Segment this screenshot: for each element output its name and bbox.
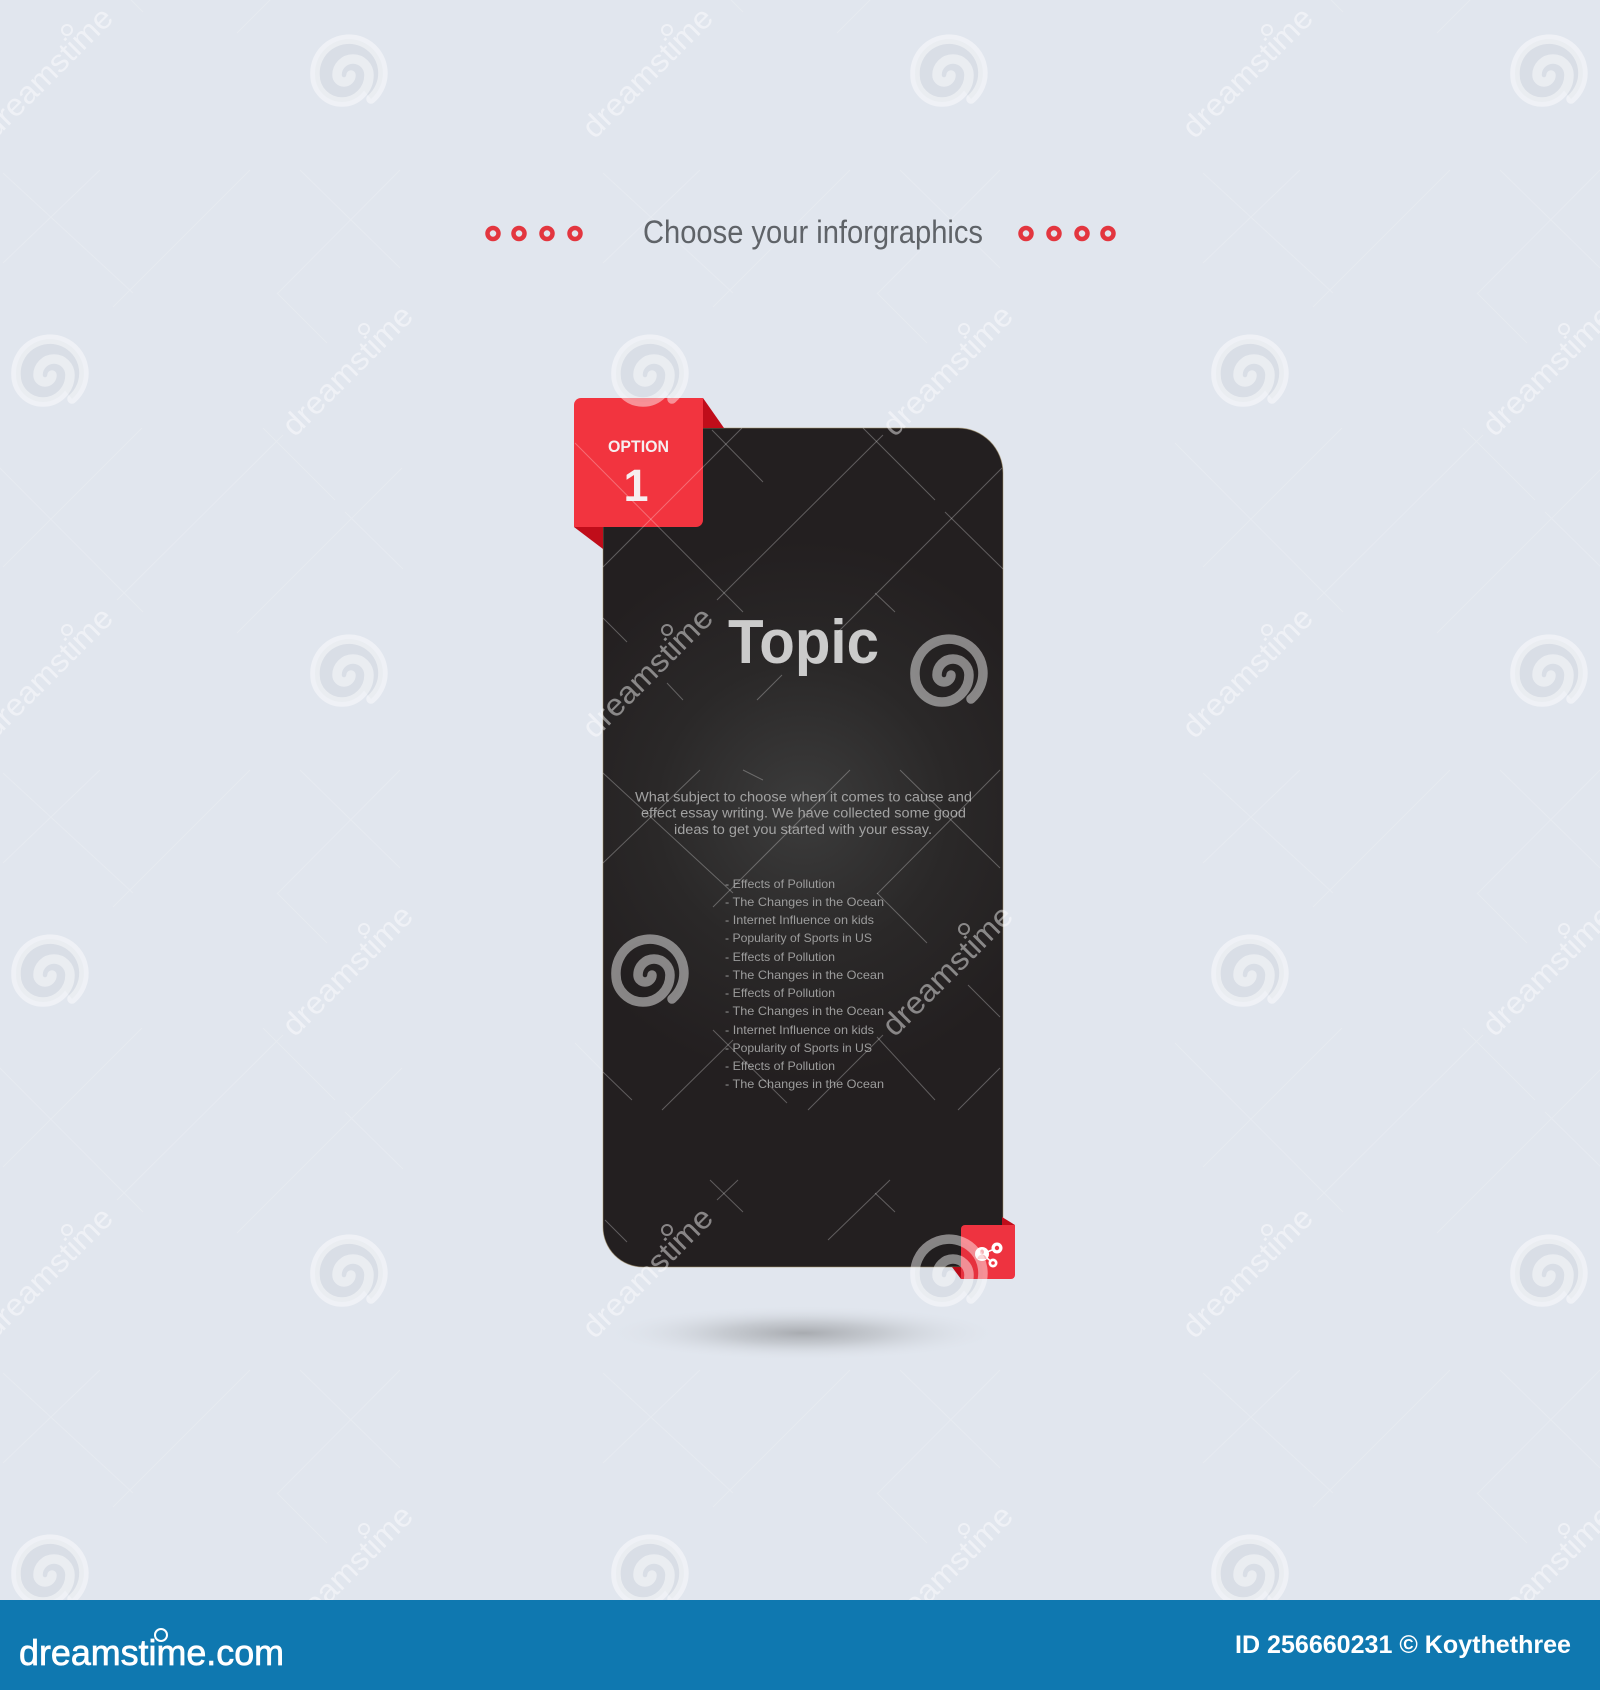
- watermark wordmarks: dreamstime: [875, 1498, 1020, 1643]
- topic list: - Effects of Pollution: [725, 877, 835, 891]
- topic list: [725, 877, 884, 1091]
- topic list: - Internet Influence on kids: [725, 1023, 874, 1037]
- footer logo: dreamstime.com: [19, 1632, 284, 1673]
- small ribbon fold: top right: [1002, 1217, 1015, 1225]
- watermark wordmarks: dreamstime: [275, 1498, 420, 1643]
- watermark wordmarks: dreamstime: [575, 600, 720, 745]
- panel: dark topic card: [603, 428, 1003, 1267]
- topic list: - Popularity of Sports in US: [725, 931, 872, 945]
- topic list: - The Changes in the Ocean: [725, 968, 884, 982]
- right dots: [1020, 228, 1114, 239]
- description paragraph: What subject to choose when it comes to cause and: [635, 790, 972, 804]
- header row: [488, 214, 1114, 250]
- watermark wordmarks: dreamstime: [1175, 0, 1320, 145]
- option tag: [574, 398, 703, 527]
- watermark wordmarks: dreamstime: [875, 898, 1020, 1043]
- ribbon fold: left: [574, 527, 603, 549]
- watermark wordmarks: dreamstime: [575, 0, 720, 145]
- topic list: - Internet Influence on kids: [725, 913, 874, 927]
- header text: Choose your inforgraphics: [643, 214, 983, 250]
- small ribbon fold: bottom left: [952, 1267, 961, 1279]
- watermark lines over card: [575, 428, 1003, 1242]
- watermark wordmarks: dreamstime: [275, 898, 420, 1043]
- topic list: - The Changes in the Ocean: [725, 1077, 884, 1091]
- topic list: - Effects of Pollution: [725, 1059, 835, 1073]
- watermark wordmarks: dreamstime: [1175, 1200, 1320, 1345]
- topic heading: Topic: [728, 608, 879, 677]
- small red tag: [961, 1225, 1015, 1279]
- image id and credit: ID 256660231 © Koythethree: [1235, 1631, 1571, 1659]
- topic list: - The Changes in the Ocean: [725, 895, 884, 909]
- option label: OPTION: [608, 438, 669, 456]
- ribbon fold: top: [703, 398, 724, 428]
- topic list: - Popularity of Sports in US: [725, 1041, 872, 1055]
- option number: 1: [623, 460, 649, 511]
- watermark wordmarks: dreamstime: [575, 1200, 720, 1345]
- description paragraph: effect essay writing. We have collected some good: [641, 806, 966, 820]
- topic list: - Effects of Pollution: [725, 986, 835, 1000]
- left dots: [488, 228, 580, 239]
- watermark wordmarks: dreamstime: [1175, 600, 1320, 745]
- topic list: - Effects of Pollution: [725, 950, 835, 964]
- icon: connected people: [975, 1242, 1002, 1268]
- watermark wordmarks: dreamstime: [275, 298, 420, 443]
- footer bar: [0, 1600, 1600, 1690]
- description paragraph: [635, 790, 972, 837]
- description paragraph: ideas to get you started with your essay.: [674, 822, 932, 837]
- topic list: - The Changes in the Ocean: [725, 1004, 884, 1018]
- floor shadow: [603, 1305, 1003, 1361]
- watermark wordmarks: dreamstime: [875, 298, 1020, 443]
